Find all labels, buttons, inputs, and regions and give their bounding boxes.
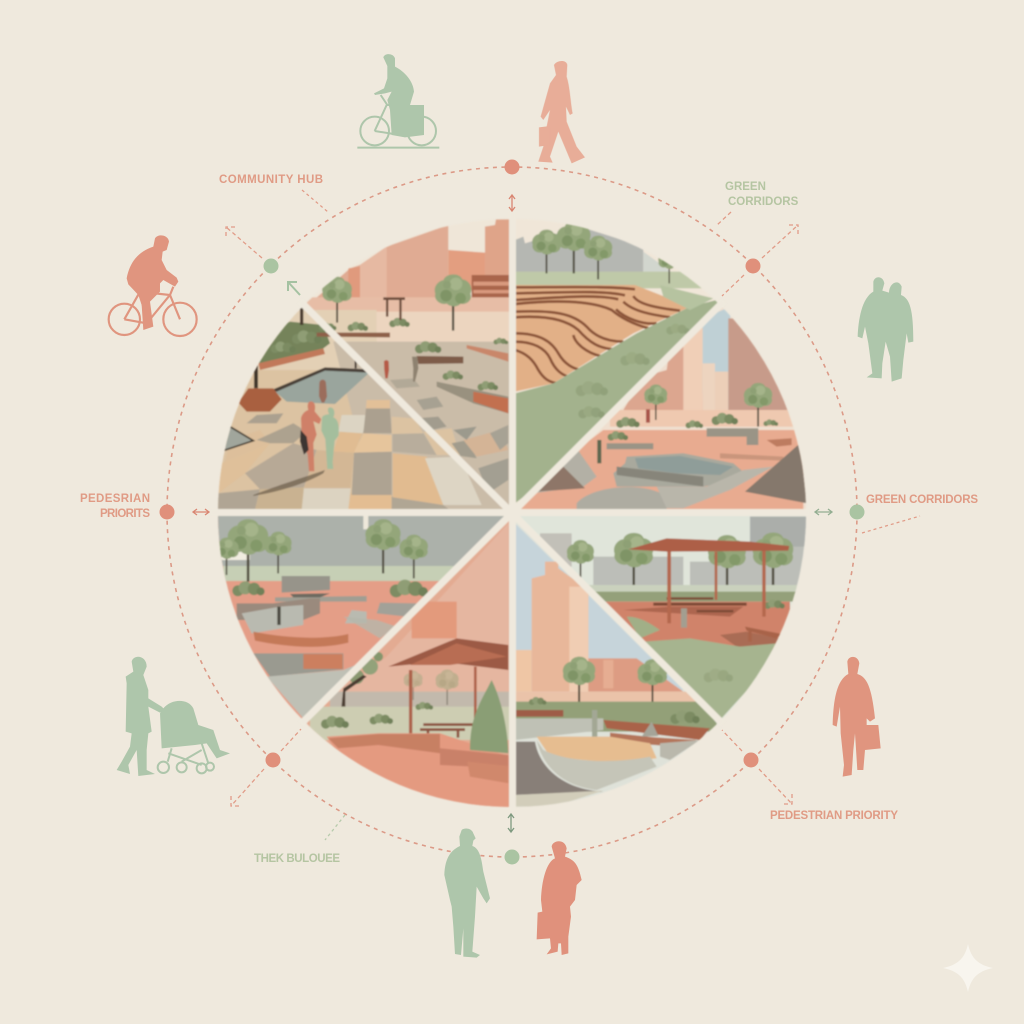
arrows and leader lines xyxy=(193,190,920,840)
image wheel xyxy=(210,210,810,812)
node: right xyxy=(850,504,864,520)
icon: man bottom xyxy=(444,829,490,958)
panel: salmon courtyard with shelter xyxy=(306,521,510,808)
icon: couple right xyxy=(858,277,913,382)
panel: skate park xyxy=(217,515,504,719)
panel: central plaza with paving xyxy=(210,210,510,510)
plaza people xyxy=(319,380,327,403)
label: community hub: COMMUNITY HUB xyxy=(219,174,323,186)
label: green corridors upper: CORRIDORS xyxy=(728,196,799,208)
node: top xyxy=(504,160,520,174)
label: lower left: THEK BULOUEE xyxy=(254,853,340,865)
node: bottom left xyxy=(266,752,280,768)
label: pedestrian priorities: PEDESRIAN xyxy=(80,493,150,505)
node: left xyxy=(160,504,174,520)
panel: tower and skate bowl xyxy=(515,523,718,807)
label: green corridors upper: GREEN xyxy=(725,181,766,193)
node: top left xyxy=(264,258,278,274)
icon: sparkle xyxy=(943,944,993,992)
paving tiles xyxy=(217,378,508,510)
label: pedestrian priorities: PRIORITS xyxy=(100,508,150,520)
label: pedestrian priority: PEDESTRIAN PRIORITY xyxy=(770,810,898,822)
icon: walking woman top xyxy=(538,61,585,163)
pool xyxy=(273,368,369,404)
panel: fountain plaza xyxy=(521,308,807,510)
node: top right xyxy=(746,258,760,274)
dashed ring xyxy=(167,167,857,857)
icon: man with bag right xyxy=(833,657,881,777)
icon: woman bottom xyxy=(537,841,582,955)
panel: pergola and meadow xyxy=(522,516,807,718)
icon: cyclist top xyxy=(357,54,439,148)
icon: parent with stroller xyxy=(117,657,230,776)
wheel dividers xyxy=(210,210,810,812)
node: bottom xyxy=(504,850,520,864)
node: bottom right xyxy=(744,752,758,768)
label: green corridors right: GREEN CORRIDORS xyxy=(866,494,978,506)
icon: cyclist left xyxy=(109,235,197,336)
panel: timber amphitheatre and grass xyxy=(515,223,718,503)
